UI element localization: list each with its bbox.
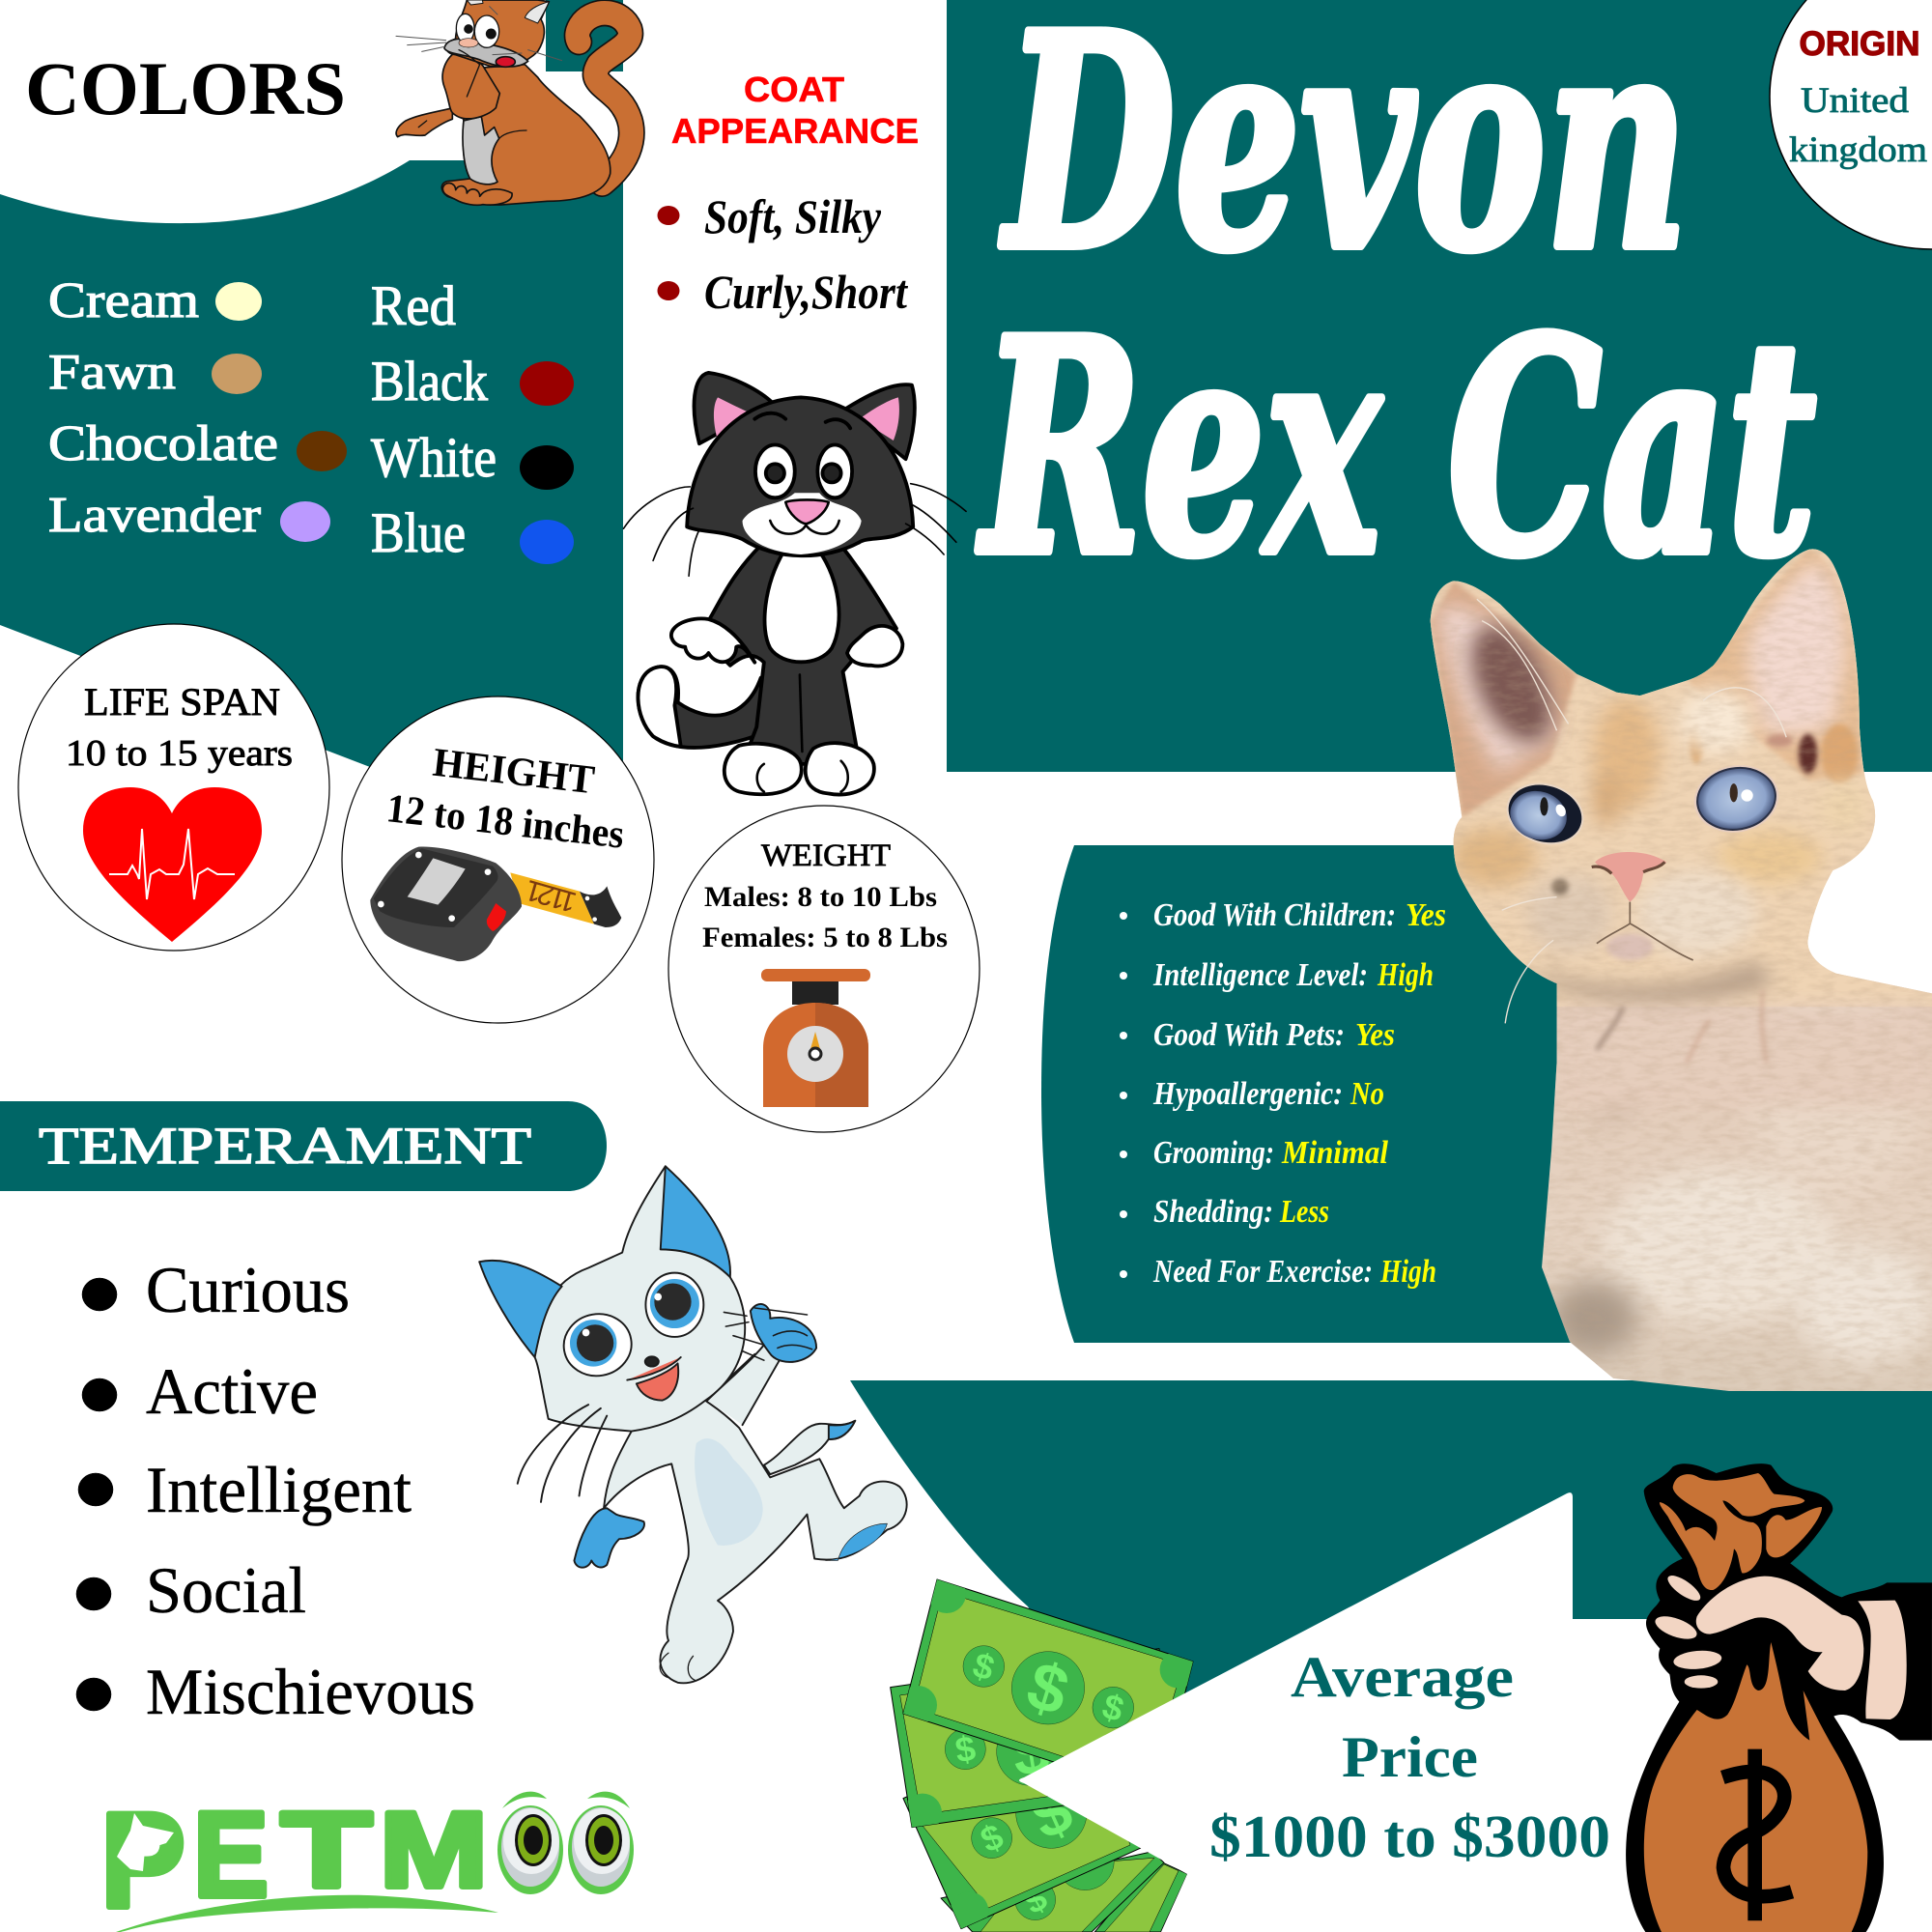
panel: traits background (1041, 845, 1642, 1343)
logo: PETMOO (100, 1784, 634, 1932)
color: lavender: Lavender (48, 488, 261, 543)
origin badge: ORIGIN (1799, 25, 1920, 63)
coat appearance list (657, 189, 909, 319)
logo: PETMOO: P (100, 1784, 185, 1932)
stat: weight: WEIGHT (761, 838, 891, 873)
photo: Devon Rex cat (1410, 541, 1932, 1391)
icon: heart with pulse (83, 787, 262, 942)
icon: tuxedo cartoon cat (623, 373, 966, 795)
trait list (1120, 897, 1446, 1290)
callout: average price arrow (1019, 1492, 1932, 1932)
icon: tape measure: 1121 (522, 873, 580, 918)
color: cream: Cream (48, 273, 199, 328)
color: white: White (371, 426, 497, 489)
trait: hypoallergenic: No (1350, 1076, 1384, 1112)
color: chocolate: Chocolate (48, 416, 278, 471)
icon: kitchen scale (761, 969, 870, 1107)
logo: PETMOO: M (380, 1790, 488, 1910)
coat appearance list: Curly,Short (704, 265, 909, 319)
trait: grooming: Grooming: (1153, 1135, 1274, 1171)
logo: PETMOO: T (281, 1790, 372, 1910)
illustration: fan of dollar bills: $ (1019, 1647, 1077, 1730)
callout: average price arrow: Price (1342, 1725, 1478, 1789)
color: fawn: Fawn (48, 345, 176, 400)
coat appearance list: Soft, Silky (704, 189, 882, 243)
stat: life span: LIFE SPAN (84, 680, 280, 724)
color: cream (48, 273, 262, 328)
color: blue (371, 501, 574, 564)
trait: good with pets: Good With Pets: (1153, 1017, 1345, 1053)
trait: shedding: Shedding: (1153, 1194, 1273, 1230)
white patch behind orange cat (546, 71, 623, 160)
color: fawn (48, 345, 262, 400)
item: active: Active (146, 1354, 318, 1428)
origin badge: United (1801, 81, 1910, 121)
trait: intelligence level: High (1377, 957, 1434, 993)
callout: average price arrow: $1000 to $3000 (1209, 1804, 1610, 1870)
heading: colors: COLORS (25, 46, 346, 130)
item: social (76, 1553, 306, 1627)
icon: blue waving cartoon cat (479, 1166, 907, 1683)
origin badge (1770, 0, 1932, 249)
trait: need for exercise: High (1379, 1254, 1436, 1290)
illustration: fan of dollar bills: $ (1008, 1715, 1054, 1791)
trait: intelligence level: Intelligence Level: (1152, 957, 1368, 993)
color: black: Black (371, 350, 488, 412)
heading: coat appearance: COAT (744, 70, 844, 109)
colors list (48, 273, 574, 564)
heading: temperament (0, 1101, 607, 1191)
color: white (371, 426, 574, 490)
stat: life span (18, 624, 329, 951)
stat: height (342, 696, 654, 1023)
color: red: Red (371, 274, 456, 337)
heading: coat appearance (671, 70, 919, 151)
trait: good with children: Good With Children: (1153, 897, 1396, 933)
panel: title background (947, 0, 1932, 772)
illustration: fan of dollar bills (891, 1575, 1197, 1932)
item: intelligent: Intelligent (146, 1453, 412, 1526)
trait: shedding (1120, 1194, 1329, 1230)
item: curious: Curious (146, 1253, 350, 1326)
title: Devon Rex Cat (976, 0, 1816, 620)
trait: hypoallergenic: Hypoallergenic: (1152, 1076, 1343, 1112)
color: chocolate (48, 416, 347, 471)
panel: price background (850, 1380, 1932, 1739)
trait: grooming (1120, 1135, 1388, 1171)
trait: good with pets: Yes (1355, 1017, 1395, 1053)
stat: height: HEIGHT (431, 741, 597, 803)
origin badge: kingdom (1789, 130, 1927, 170)
item: social: Social (146, 1553, 306, 1627)
trait: need for exercise: Need For Exercise: (1152, 1254, 1373, 1290)
icon: orange cartoon cat (396, 0, 632, 205)
heading: temperament: TEMPERAMENT (39, 1117, 531, 1175)
icon: hand holding money bag (1626, 1463, 1932, 1932)
illustration: fan of dollar bills: $ (1017, 1878, 1054, 1922)
illustration: fan of dollar bills: $ (1098, 1686, 1128, 1729)
temperament list (76, 1253, 475, 1728)
illustration: fan of dollar bills: $ (952, 1728, 979, 1771)
illustration: fan of dollar bills: $ (975, 1816, 1009, 1861)
stat: weight: Females: 5 to 8 Lbs (702, 922, 948, 953)
callout: average price arrow: Average (1291, 1645, 1514, 1709)
color: black (371, 350, 574, 412)
item: mischievous: Mischievous (146, 1655, 475, 1728)
stat: life span: 10 to 15 years (66, 733, 293, 774)
color: lavender (48, 488, 330, 543)
trait: good with children: Yes (1406, 897, 1446, 933)
logo: PETMOO: E (193, 1788, 269, 1922)
panel: colors background (0, 0, 623, 773)
heading: coat appearance: APPEARANCE (671, 111, 919, 151)
illustration: fan of dollar bills: $ (969, 1645, 999, 1689)
stat: height: 12 to 18 inches (384, 786, 626, 858)
stat: weight (668, 806, 980, 1132)
trait: grooming: Minimal (1281, 1135, 1388, 1171)
trait: shedding: Less (1279, 1194, 1329, 1230)
color: blue: Blue (371, 501, 466, 564)
illustration: fan of dollar bills: $ (1021, 1775, 1083, 1854)
icon: tape measure (370, 847, 621, 961)
stat: weight: Males: 8 to 10 Lbs (704, 881, 937, 913)
